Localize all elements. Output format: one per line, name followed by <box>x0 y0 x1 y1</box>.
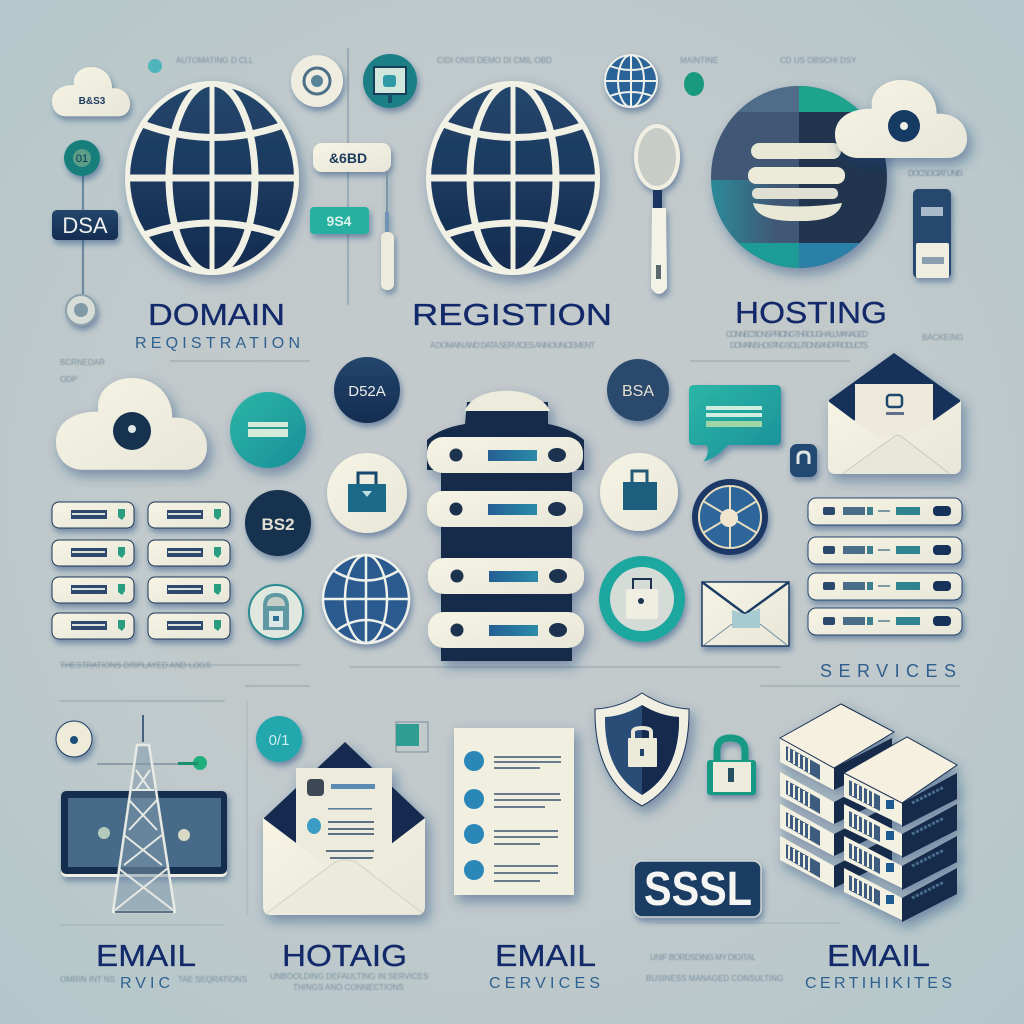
document: checklist <box>454 728 574 895</box>
globe: domain <box>125 81 299 275</box>
background annotations and separators: BCRNEDAR <box>60 358 105 367</box>
icon: small globe top <box>604 54 658 108</box>
background annotations and separators: DOMAINS HOSTING SOLUTIONS AND PRODUCTS <box>730 341 868 350</box>
central server stack <box>427 391 584 661</box>
subheading: REGISTRATION: REQISTRATION <box>135 335 300 352</box>
subheading: SERVICES: CERVICES <box>489 975 600 992</box>
small server slats: left grid <box>52 502 230 639</box>
icon: tiny lock tile <box>790 444 817 477</box>
icon: wheel <box>692 479 768 555</box>
icon: teal dot <box>148 59 162 73</box>
badge: teal code: 0/1 <box>269 732 289 749</box>
heading: HOTAIG: HOTAIG <box>282 938 407 973</box>
checklist bullets <box>464 751 484 880</box>
heading: REGISTION: REGISTION <box>412 297 612 332</box>
icon: teal node pin <box>64 140 100 176</box>
icon: medium globe <box>322 554 410 644</box>
icon: open envelope with letter <box>263 742 425 915</box>
subheading: RVIC: RVIC <box>120 975 170 992</box>
label pill 2: 9S4 <box>327 213 352 229</box>
icon: small cloud with label: B&S3 <box>79 96 106 107</box>
icon: small cloud with label <box>52 67 130 116</box>
heading: DOMAIN: DOMAIN <box>148 297 285 332</box>
icon: green padlock <box>707 738 756 795</box>
badge: D52A: D52A <box>348 383 386 400</box>
icon: server tower small <box>913 189 951 278</box>
subheading: CERTIFICATES: CERTIHIKITES <box>805 975 952 992</box>
icon: hosting cloud <box>835 80 967 158</box>
heading: SERVICES: SERVICES <box>820 661 956 681</box>
background annotations and separators: CIDI ONIS DEMO DI CMIL OBD <box>437 56 552 65</box>
background annotations and separators: BUSINESS MANAGED CONSULTING <box>646 974 783 983</box>
background annotations and separators: OMRIN INT NS <box>60 975 115 984</box>
icon: shield with padlock <box>595 693 689 806</box>
background annotations and separators: UNBOOLDING DEFAULTING IN SERVICES <box>270 972 428 981</box>
background annotations and separators: ODP <box>60 375 77 384</box>
background annotations and separators: BACKEING <box>922 333 963 342</box>
icon: transmission tower <box>113 715 175 912</box>
background annotations and separators: CONNECTIONS PRICING THROUGH ALL MANAGED <box>726 330 868 339</box>
icon: teal node pin: 01 <box>76 153 88 165</box>
icon: small envelope <box>702 582 789 646</box>
badge: DSA: DSA <box>62 213 108 238</box>
badge: SSSL: SSSL <box>644 863 752 916</box>
heading: EMAIL 2: EMAIL <box>495 938 596 973</box>
heading: EMAIL 1: EMAIL <box>96 938 196 973</box>
background annotations and separators: TAE SEQRATIONS <box>178 975 247 984</box>
badge: BS2: BS2 <box>261 515 295 534</box>
icon: large cloud <box>56 378 207 470</box>
icon: hosting database disc <box>711 86 887 269</box>
badge: BSA <box>607 359 669 421</box>
background annotations and separators: AUTOMATING D CLL <box>176 56 254 65</box>
icon: lock badge <box>249 585 303 639</box>
icon: spoon <box>634 124 680 294</box>
background annotations and separators: MAINTINE <box>680 56 718 65</box>
background annotations and separators: UNIF BORDSDING MY DIGITAL <box>650 953 757 962</box>
icon: speech bubble <box>689 385 781 462</box>
background annotations and separators: CD US OBSCHI DSY <box>780 56 857 65</box>
background annotations and separators: THINGS ANO CONNECTIONS <box>293 983 404 992</box>
badge: BSA: BSA <box>622 383 654 400</box>
icon: green pin <box>684 72 704 96</box>
badge: DSA <box>52 210 118 240</box>
icon: round seal <box>66 295 96 325</box>
icon: tablet screen <box>61 791 227 877</box>
heading: HOSTING: HOSTING <box>735 295 887 330</box>
label pill 1 <box>313 143 391 172</box>
icon: lock on cream disc right <box>600 453 678 531</box>
icon: cream dot <box>56 721 92 757</box>
background annotations and separators: A DOMAIN AND DATA SERVICES ANNOUNCEMENT <box>430 341 595 350</box>
label pill 1: &6BD <box>329 150 367 166</box>
background annotations and separators: DOCSOCIAT UNIS <box>908 169 963 178</box>
server slats: right stack <box>808 498 962 635</box>
label pill 2 <box>310 207 369 234</box>
icon: torn badge <box>291 55 343 107</box>
background annotations and separators: THESTRATIONS DISPLAYED AND LOGS <box>60 661 211 670</box>
badge: teal code <box>256 716 302 762</box>
icon: teal disc <box>230 392 306 468</box>
icon: teal website badge <box>363 54 417 108</box>
icon: lock on cream disc <box>327 453 407 533</box>
icon: green pin connector <box>97 756 207 770</box>
icon: isometric server racks <box>780 704 957 922</box>
icon: teal window <box>396 722 428 752</box>
badge: BS2 <box>245 490 311 556</box>
icon: probe stick <box>381 172 394 290</box>
heading: EMAIL 3: EMAIL <box>827 938 930 973</box>
icon: teal ring padlock <box>599 556 685 642</box>
globe: registration <box>426 81 600 275</box>
icon: open envelope <box>828 353 961 474</box>
badge: D52A <box>334 357 400 423</box>
